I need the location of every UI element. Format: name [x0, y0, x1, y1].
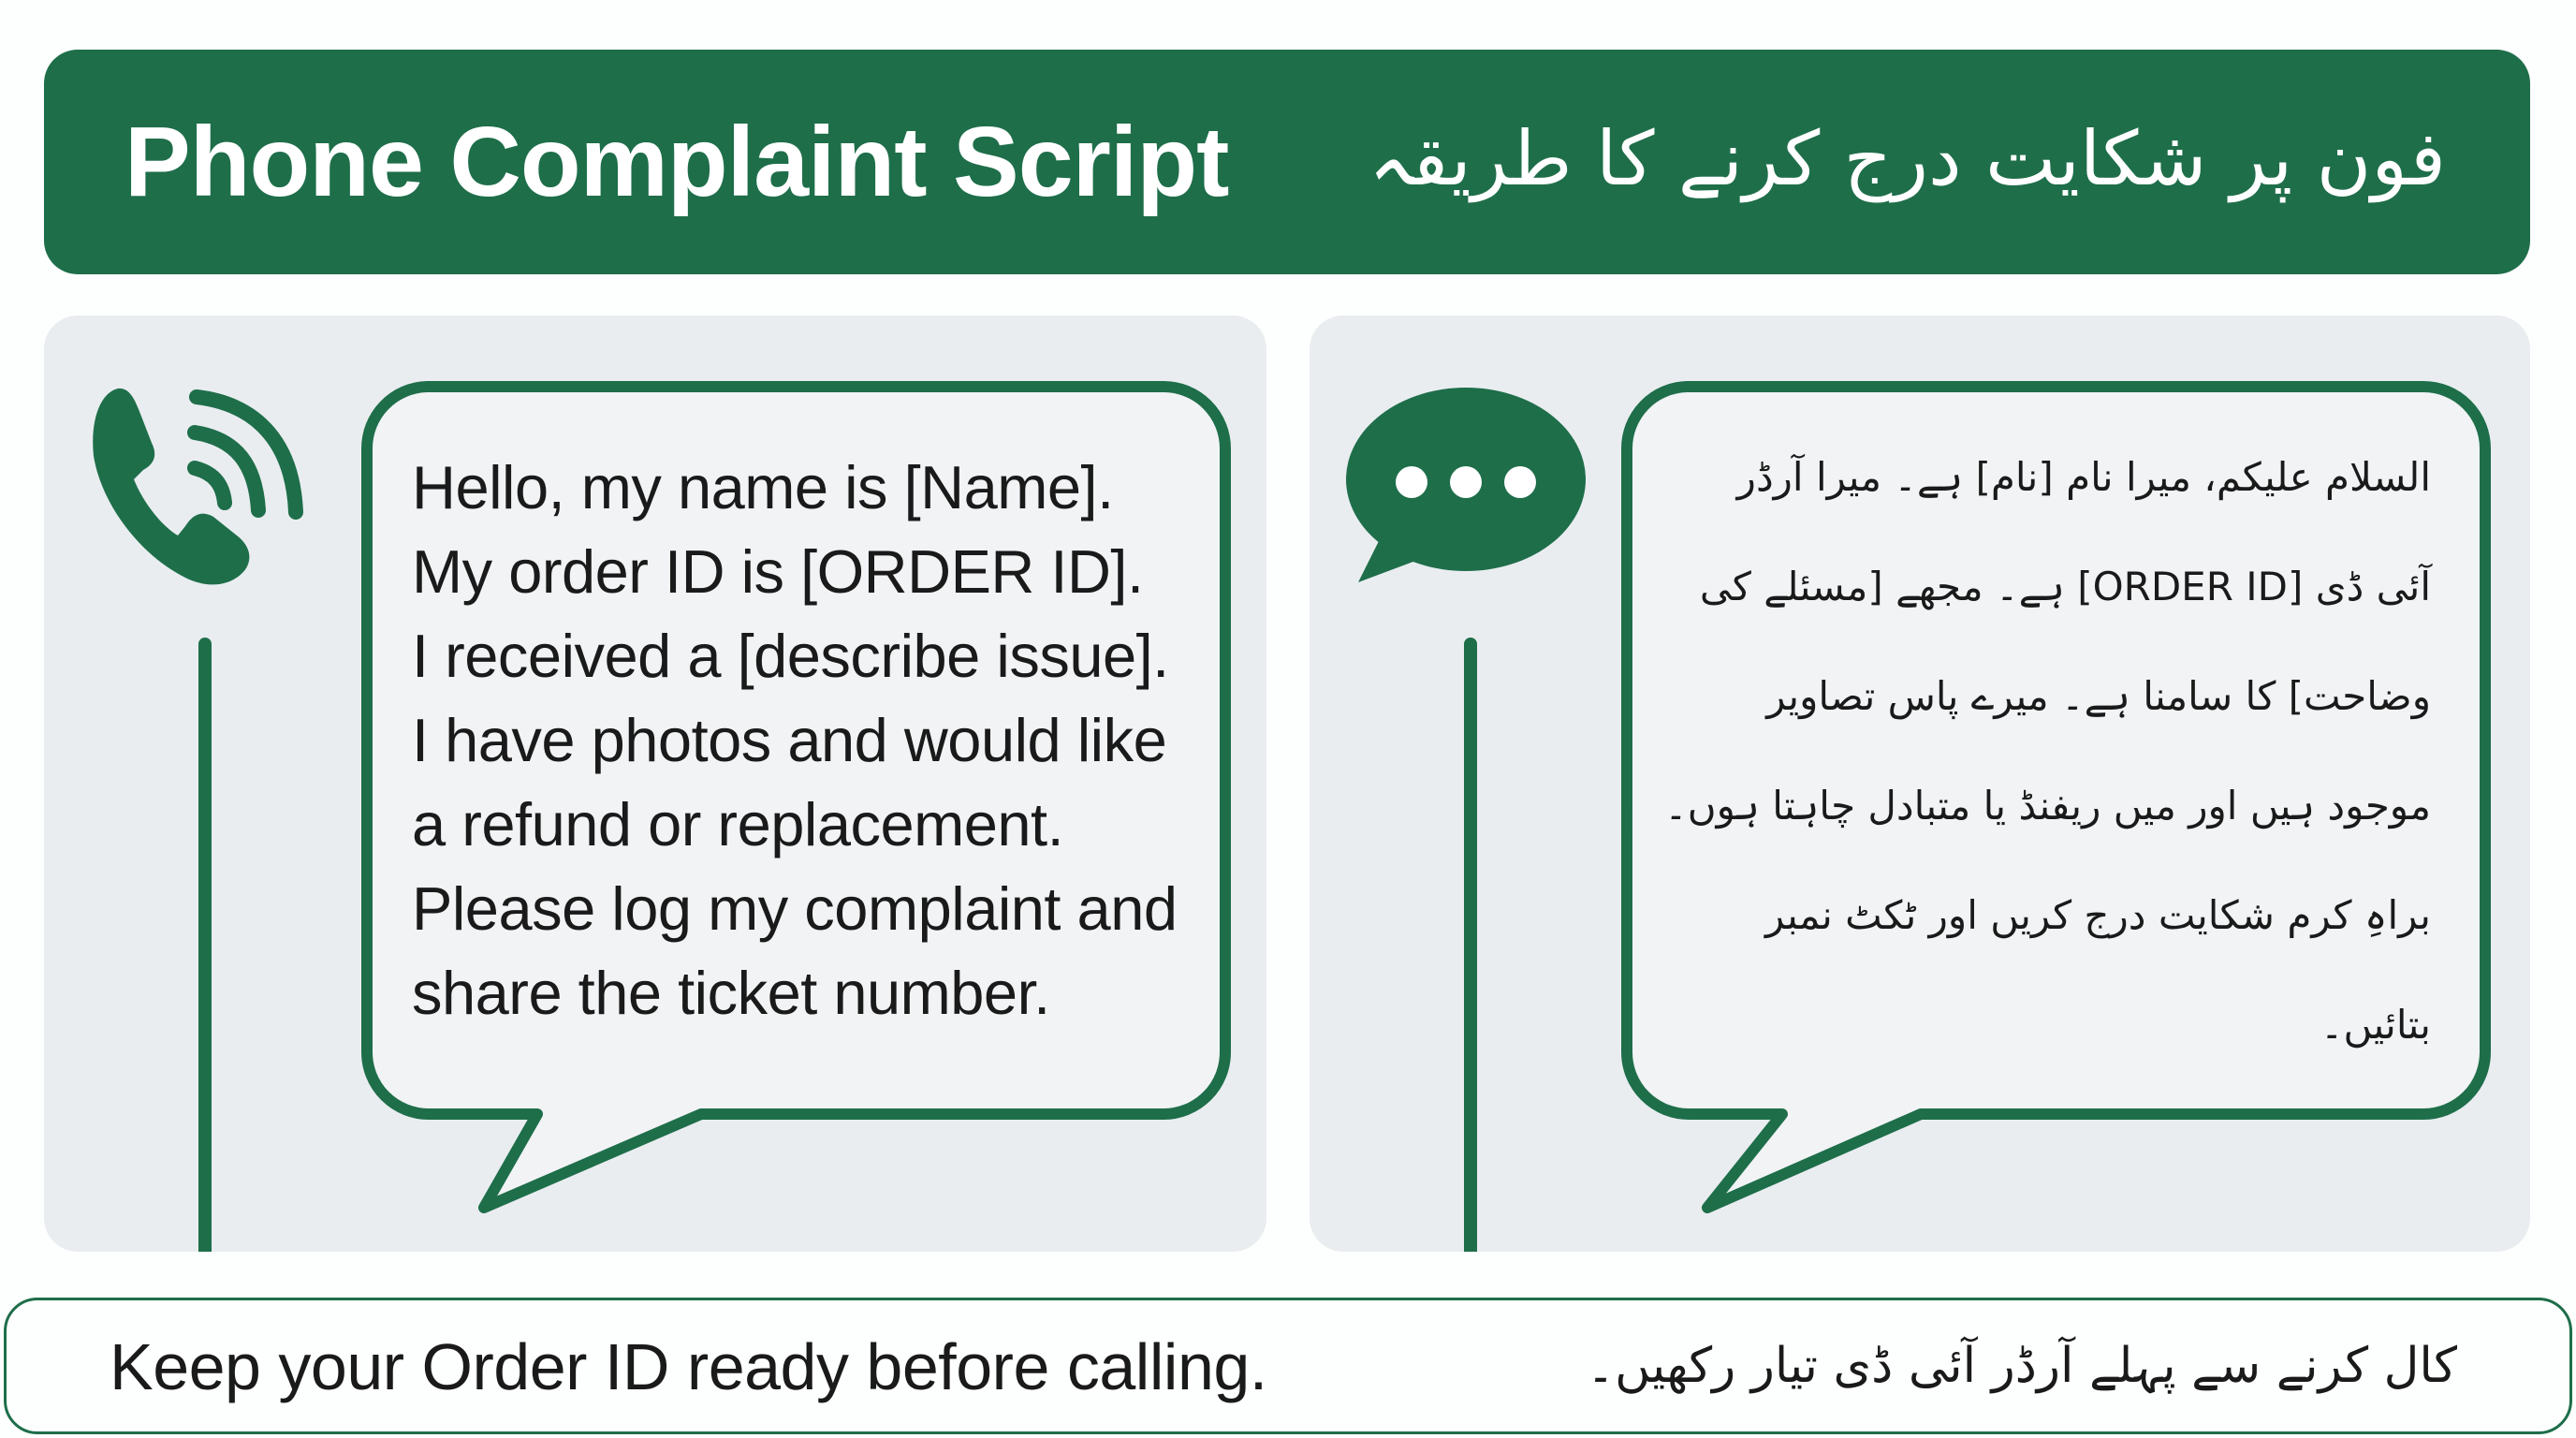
- script text: urdu: آئی ڈی [ORDER ID] ہے۔ مجھے [مسئلے کی: [1700, 564, 2431, 609]
- script text: urdu: موجود ہیں اور میں ریفنڈ یا متبادل چاہتا ہوں۔: [1664, 783, 2431, 829]
- script text: urdu: [1664, 453, 2433, 1049]
- script text: english: share the ticket number.: [412, 959, 1050, 1027]
- script text: english: My order ID is [ORDER ID].: [412, 537, 1144, 606]
- timeline line: [198, 638, 212, 1252]
- panel: urdu script: [1310, 315, 2530, 1252]
- script text: urdu: السلام علیکم، میرا نام [نام] ہے۔ میرا آرڈر: [1737, 454, 2431, 500]
- script text: english: Please log my complaint and: [412, 874, 1178, 943]
- script text: english: a refund or replacement.: [412, 790, 1063, 858]
- icon: chat bubble: [1346, 388, 1586, 582]
- script text: english: Hello, my name is [Name].: [412, 453, 1114, 521]
- tip text: urdu: کال کرنے سے پہلے آرڈر آئی ڈی تیار رکھیں۔: [1587, 1338, 2457, 1394]
- title: urdu: فون پر شکایت درج کرنے کا طریقہ: [1368, 115, 2446, 202]
- icon: phone: [93, 388, 303, 584]
- script text: urdu: براہِ کرم شکایت درج کریں اور ٹکٹ نمبر: [1765, 892, 2431, 938]
- speech bubble: english: [361, 381, 1231, 1213]
- script text: english: I have photos and would like: [412, 706, 1166, 774]
- footer tip bar: [4, 1298, 2572, 1434]
- script text: urdu: بتائیں۔: [2320, 1002, 2431, 1048]
- timeline line: [1464, 638, 1477, 1252]
- speech bubble: urdu: [1621, 381, 2491, 1213]
- header banner: [44, 50, 2530, 274]
- script text: urdu: وضاحت] کا سامنا ہے۔ میرے پاس تصاویر: [1766, 673, 2431, 719]
- tip text: english: Keep your Order ID ready before calling.: [110, 1330, 1267, 1403]
- script text: english: [412, 453, 1178, 1027]
- panel: english script: [44, 315, 1266, 1252]
- script text: english: I received a [describe issue].: [412, 622, 1169, 690]
- title: english: Phone Complaint Script: [124, 107, 1228, 217]
